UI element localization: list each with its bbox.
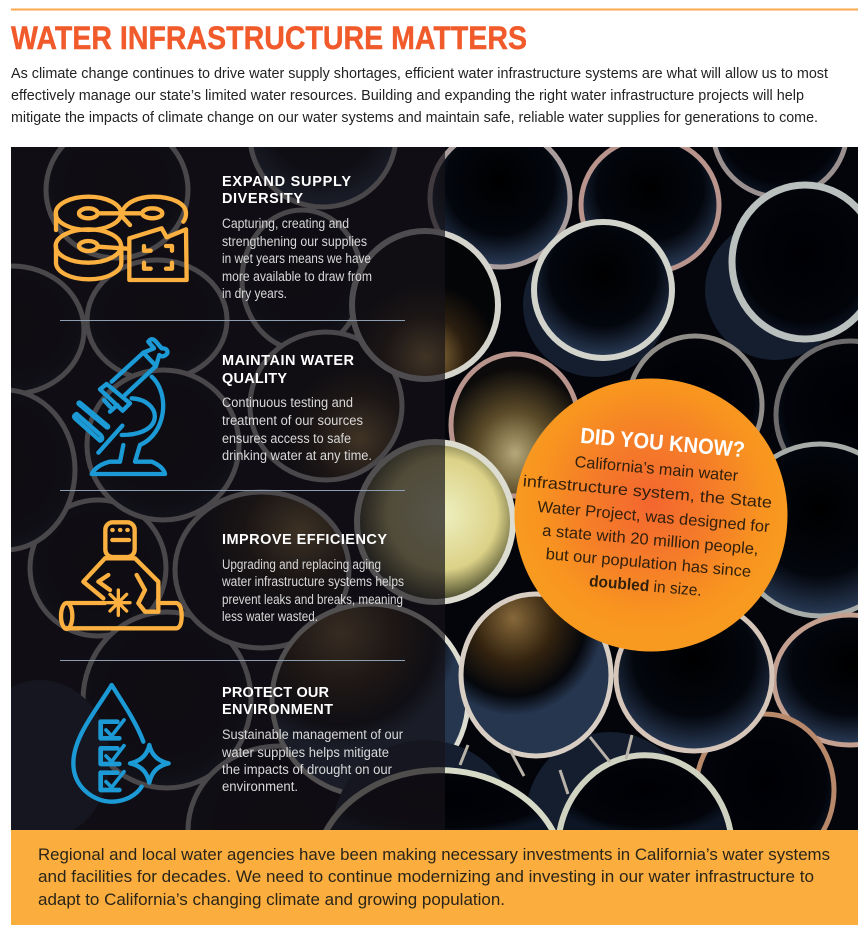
heading: IMPROVE EFFICIENCY [222, 532, 387, 548]
callout text: California’s main water [574, 454, 740, 485]
body text: ensures access to safe [222, 431, 351, 446]
callout: did you know [514, 378, 788, 652]
body text: prevent leaks and breaks, meaning [222, 592, 403, 607]
heading: QUALITY [222, 371, 287, 387]
body text: less water wasted. [222, 609, 318, 624]
item: improve efficiency [61, 522, 404, 629]
body text [222, 216, 372, 301]
heading [222, 353, 355, 387]
body text: in dry years. [222, 286, 287, 301]
body text: Capturing, creating and [222, 216, 349, 231]
pipe bodies [11, 234, 824, 830]
body text: environment. [222, 779, 298, 794]
callout text: Water Project, was designed for [537, 499, 771, 536]
heading: DIVERSITY [222, 191, 303, 207]
heading: ENVIRONMENT [222, 702, 333, 718]
body text: the impacts of drought on our [222, 762, 392, 777]
body text [221, 557, 404, 624]
heading [222, 685, 333, 718]
icon: welder on pipe [61, 522, 182, 629]
body text: water supplies helps mitigate [221, 745, 389, 760]
body text: Sustainable management of our [222, 727, 403, 742]
heading: MAINTAIN WATER [222, 353, 355, 369]
intro paragraph [11, 65, 829, 126]
callout text: doubled in size. [588, 573, 702, 600]
title: WATER INFRASTRUCTURE MATTERS [11, 20, 527, 56]
item: maintain water quality [74, 339, 372, 474]
body text: treatment of our sources [222, 413, 363, 428]
intro paragraph: As climate change continues to drive water supply shortages, efficient water infrastructure systems are what will allow us to most [11, 65, 829, 82]
icon: reservoirs and factory [56, 197, 187, 280]
item: protect our environment [73, 685, 403, 802]
icon: microscope [74, 339, 167, 474]
intro paragraph: mitigate the impacts of climate change on our water systems and maintain safe, reliable water supplies for generations to come. [11, 109, 818, 126]
body text: Continuous testing and [222, 395, 353, 410]
callout heading: DID YOU KNOW? [579, 423, 746, 462]
heading: PROTECT OUR [222, 685, 330, 701]
left dark overlay panel [11, 147, 445, 830]
body text: more available to draw from [222, 269, 372, 284]
photo panel: stacked pipes [11, 147, 858, 830]
callout text: but our population has since [545, 546, 752, 581]
callout text: a state with 20 million people, [542, 523, 759, 558]
item: expand supply diversity [56, 174, 372, 301]
heading [222, 174, 351, 207]
body text: Upgrading and replacing aging [222, 557, 381, 572]
icon: water drop checklist [73, 685, 169, 802]
top rule [11, 8, 858, 10]
body text: drinking water at any time. [222, 448, 372, 463]
body text: strengthening our supplies [222, 234, 367, 249]
footer text: Regional and local water agencies have been making necessary investments in California’s water systems [38, 845, 830, 864]
footer banner [11, 830, 858, 925]
body text [222, 395, 372, 463]
footer text: adapt to California’s changing climate and growing population. [38, 890, 505, 909]
footer text: and facilities for decades. We need to continue modernizing and investing in our water infrastructure to [38, 867, 814, 886]
callout text [522, 454, 773, 600]
heading: EXPAND SUPPLY [222, 174, 351, 190]
footer text [38, 845, 830, 909]
body text: water infrastructure systems helps [221, 574, 404, 589]
callout text: infrastructure system, the State [522, 473, 773, 512]
body text [221, 727, 403, 794]
intro paragraph: effectively manage our state’s limited water resources. Building and expanding the right water infrastructure projects will help [11, 87, 804, 104]
body text: in wet years means we have [222, 251, 371, 266]
